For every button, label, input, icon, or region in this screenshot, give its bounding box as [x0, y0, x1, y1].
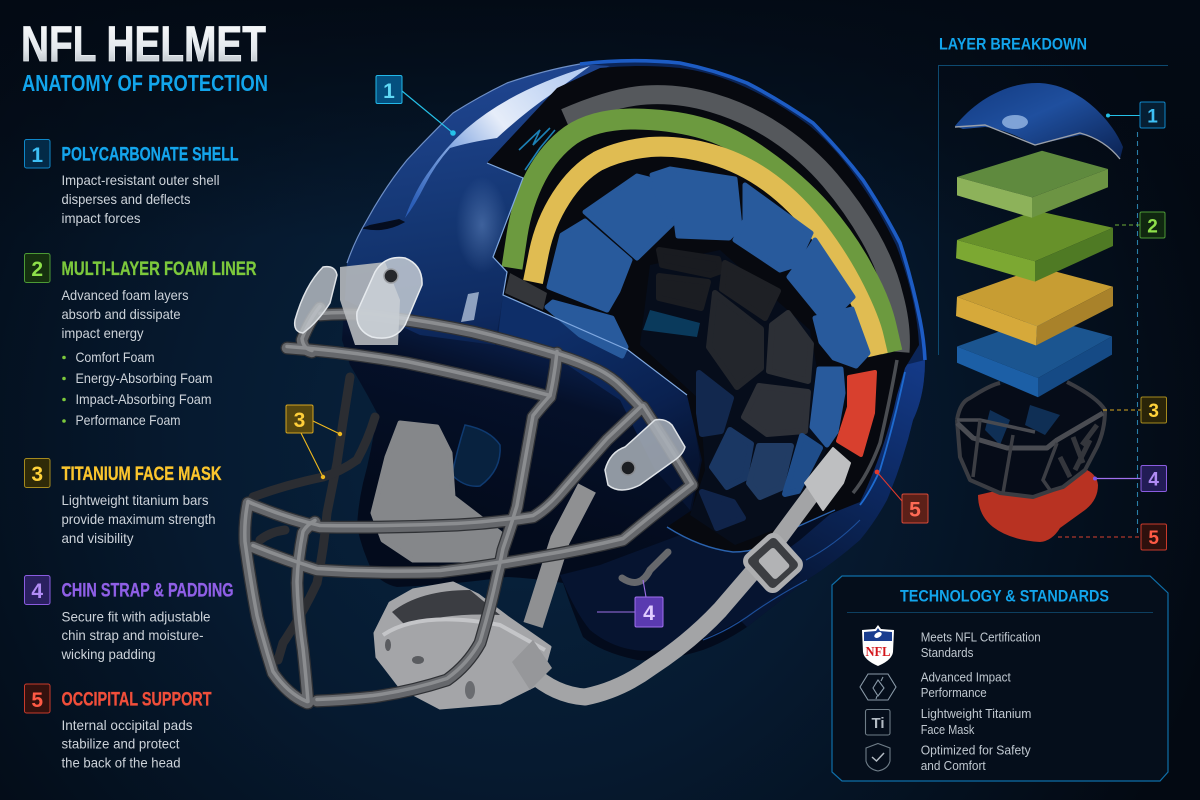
inner lower cavity: [640, 250, 830, 545]
legend item 3: titanium face mask: TITANIUM FACE MASK: [62, 463, 222, 485]
panel: layer breakdown: [938, 36, 1168, 550]
blue wires: [519, 128, 555, 170]
legend item 5: occipital support: OCCIPITAL SUPPORT: [62, 689, 212, 711]
panel: component legend: [24, 140, 256, 770]
side strap: [533, 488, 587, 625]
legend item 5: occipital support: Internal occipital pads: [62, 717, 192, 733]
legend item 4: chin strap and padding: chin strap and moisture-: [62, 627, 204, 643]
breakdown label 1: 1: [1147, 106, 1158, 128]
legend item 3: titanium face mask: Lightweight titanium bars: [62, 492, 208, 508]
callout 3 on helmet: 3: [294, 409, 305, 432]
shell textured glow: [456, 177, 508, 273]
legend item 1: polycarbonate shell: [24, 140, 239, 226]
callout 4 on helmet: [597, 580, 663, 627]
helmet shell: [342, 61, 925, 660]
legend item 2: multi-layer foam liner: Performance Foam: [76, 412, 180, 428]
rear grey liner edge: [853, 360, 897, 493]
legend item 1: polycarbonate shell: 1: [31, 144, 43, 167]
exploded layer: blue comfort foam: [957, 317, 1112, 397]
jaw pad: [373, 423, 500, 560]
occipital red pad: [838, 372, 875, 455]
breakdown label 2: [1115, 212, 1165, 238]
glass inner reflection: [643, 310, 700, 337]
green foam layer: [512, 119, 892, 352]
breakdown label 5: [1058, 524, 1166, 550]
lower shell highlight lines: [703, 520, 860, 640]
small reflection: [461, 292, 479, 322]
clear clip right: [605, 420, 685, 490]
dark inner foam pads: [659, 250, 811, 434]
chin strap snap: [622, 552, 668, 582]
standards list: Optimized for Safety: [921, 744, 1031, 758]
breakdown label 1: [1106, 102, 1165, 128]
cutaway edge highlights: [487, 163, 687, 395]
strap end plate: [805, 448, 850, 510]
legend item 2: multi-layer foam liner: Advanced foam layers: [62, 287, 188, 303]
title: NFL HELMET: [21, 16, 266, 72]
shell dome: [345, 64, 610, 345]
standards list: Lightweight Titanium: [921, 707, 1031, 721]
back mask bars: [253, 377, 375, 660]
clear clip centre: [357, 258, 422, 338]
legend item 1: polycarbonate shell: disperses and deflects: [62, 191, 190, 207]
rear lower shell: [720, 360, 925, 627]
legend item 2: multi-layer foam liner: impact energy: [62, 325, 144, 341]
standards list: Standards: [921, 646, 973, 660]
frame: [938, 66, 1168, 355]
icon: titanium box: Ti: [871, 715, 885, 732]
legend item 2: multi-layer foam liner: Energy-Absorbing Foam: [76, 370, 212, 386]
shell outer bright edge: [580, 61, 925, 360]
legend item 3: titanium face mask: 3: [31, 463, 43, 486]
vertical guide: [1136, 132, 1138, 535]
strap buckle: [743, 533, 803, 593]
top bracket: [340, 262, 400, 345]
exploded layer: shell: [955, 83, 1123, 159]
legend item 3: titanium face mask: [24, 458, 222, 546]
icon: NFL shield: NFL: [866, 645, 890, 660]
legend item 4: chin strap and padding: Secure fit with adjustable: [62, 609, 211, 625]
yellow foam layer: [533, 147, 878, 355]
blue comfort pads: [547, 169, 868, 445]
exploded layer: yellow foam: [956, 267, 1113, 346]
standards list: Face Mask: [921, 723, 975, 737]
standards list: and Comfort: [921, 759, 986, 773]
standards list: [921, 631, 1041, 773]
chin strap: [512, 448, 850, 697]
icon: NFL shield: [862, 625, 894, 666]
exploded layer: green foam lower: [956, 211, 1113, 282]
callout 3 on helmet: [286, 405, 342, 479]
breakdown label 3: [1103, 397, 1166, 423]
breakdown label 4: 4: [1148, 470, 1159, 490]
title: [21, 16, 268, 96]
breakdown label 2: 2: [1147, 216, 1158, 238]
dim blue lower pads: [699, 373, 820, 528]
legend item 2: multi-layer foam liner: 2: [31, 258, 43, 281]
helmet cross-section illustration: [245, 61, 925, 708]
legend item 1: polycarbonate shell: Impact-resistant outer shell: [62, 172, 220, 188]
slot in shell: [365, 220, 403, 229]
icon: impact hexagon: [860, 674, 896, 700]
standards list: Advanced Impact: [921, 671, 1011, 685]
face mask bars: [245, 306, 692, 703]
exploded layer: face mask cage: [957, 382, 1105, 497]
ear hole: [452, 425, 500, 486]
legend item 2: multi-layer foam liner: MULTI-LAYER FOAM LINER: [62, 258, 256, 280]
rear blue edge: [860, 372, 905, 505]
exploded layer: occipital pad: [978, 470, 1098, 542]
shell left edge highlight: [347, 64, 580, 263]
layer breakdown heading: LAYER BREAKDOWN: [939, 36, 1087, 54]
chin cup: [375, 583, 550, 708]
legend item 4: chin strap and padding: 4: [31, 580, 43, 603]
icon: safety shield: [866, 744, 890, 771]
lower cavity edge: [667, 510, 835, 552]
legend item 1: polycarbonate shell: POLYCARBONATE SHELL: [62, 144, 239, 166]
legend item 3: titanium face mask: provide maximum strength: [62, 511, 216, 527]
callout 4 on helmet: 4: [643, 602, 655, 625]
legend item 1: polycarbonate shell: impact forces: [62, 210, 140, 226]
legend item 5: occipital support: 5: [31, 689, 43, 712]
callout 1 on helmet: 1: [383, 80, 395, 103]
legend item 5: occipital support: stabilize and protect: [62, 736, 180, 752]
panel: technology and standards: [832, 576, 1168, 781]
dark foam block: [505, 273, 547, 310]
exploded layer: green foam upper: [957, 151, 1108, 218]
panel heading: TECHNOLOGY & STANDARDS: [900, 587, 1109, 606]
legend item 5: occipital support: the back of the head: [62, 754, 180, 770]
legend item 2: multi-layer foam liner: [24, 254, 256, 428]
clear clip left: [295, 267, 337, 333]
divider: [847, 612, 1153, 614]
callout 5 on helmet: [875, 470, 928, 523]
breakdown label 5: 5: [1148, 528, 1159, 549]
breakdown label 4: [1093, 466, 1166, 492]
helmet cutaway opening: [487, 66, 919, 552]
breakdown label 3: 3: [1148, 401, 1159, 422]
legend item 5: occipital support: [24, 684, 212, 770]
legend item 3: titanium face mask: and visibility: [62, 530, 134, 546]
callout 5 on helmet: 5: [909, 498, 921, 522]
cheek diagonal panel: [497, 295, 700, 510]
legend item 4: chin strap and padding: [24, 576, 234, 662]
standards list: Meets NFL Certification: [921, 631, 1041, 645]
legend item 2: multi-layer foam liner: Impact-Absorbing Foam: [76, 391, 212, 407]
shell sheen highlight: [405, 66, 590, 218]
legend item 2: multi-layer foam liner: absorb and dissipate: [62, 306, 181, 322]
standards list: Performance: [921, 686, 987, 700]
legend item 4: chin strap and padding: wicking padding: [61, 646, 156, 662]
legend item 4: chin strap and padding: CHIN STRAP & PADDING: [62, 580, 234, 602]
icon: titanium box: [866, 710, 890, 735]
legend item 2: multi-layer foam liner: Comfort Foam: [76, 349, 154, 365]
lower cheek panel: [560, 535, 800, 651]
subtitle: ANATOMY OF PROTECTION: [22, 70, 268, 96]
callout 1 on helmet: [376, 76, 456, 136]
grey foam layer: [565, 95, 900, 352]
